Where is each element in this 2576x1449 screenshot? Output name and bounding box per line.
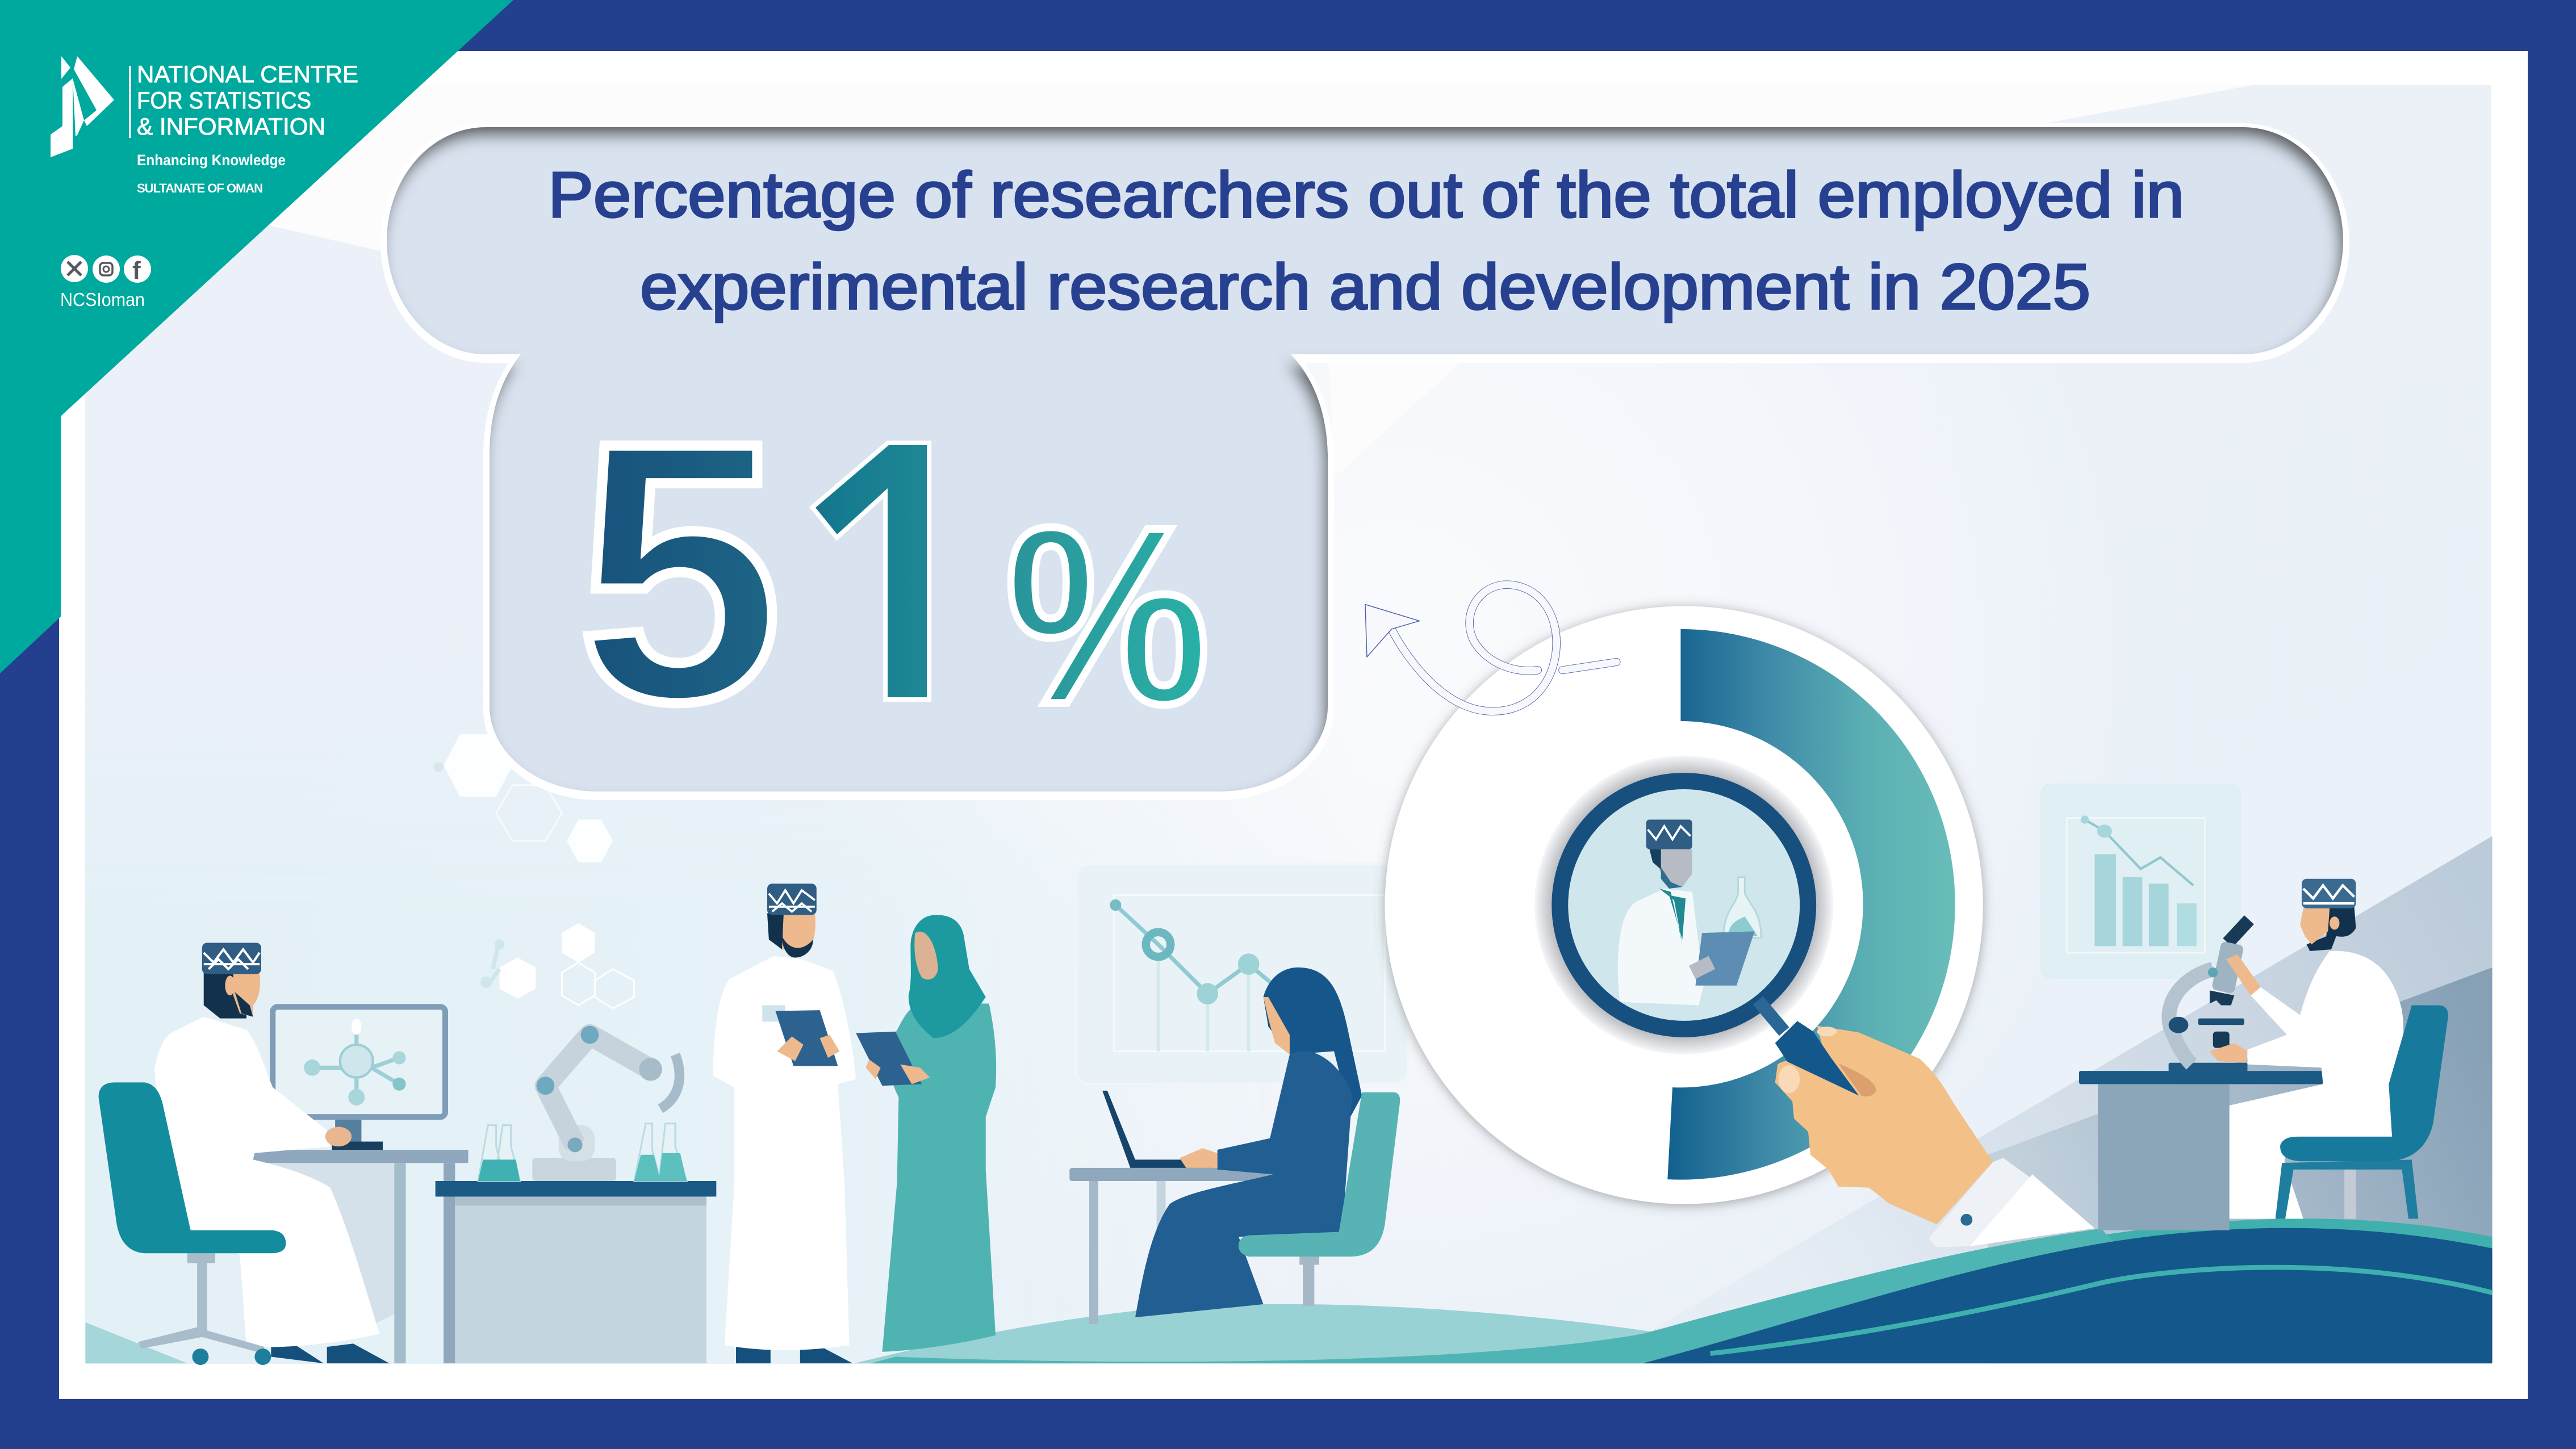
title text: experimental research and development in 2025	[640, 251, 2090, 323]
figure	[1264, 968, 1362, 1117]
title text: Percentage of researchers out of the total employed in	[548, 159, 2184, 231]
big value 51 percent	[583, 441, 1207, 709]
head	[767, 883, 817, 958]
robe	[154, 1017, 379, 1347]
researcher in lens	[1618, 820, 1761, 1005]
desk	[1069, 1168, 1273, 1324]
curly arrow	[1365, 585, 1617, 711]
ground waves	[85, 1304, 1709, 1363]
flasks	[478, 1124, 687, 1181]
organisation name: FOR STATISTICS	[137, 87, 311, 114]
icon: Facebook	[124, 256, 151, 284]
seated man at computer	[99, 943, 468, 1365]
hand holding magnifier	[1775, 1021, 2094, 1247]
monitor	[273, 1007, 445, 1146]
percent sign: %	[1005, 475, 1210, 757]
divider	[129, 66, 131, 138]
chair	[2276, 1005, 2448, 1219]
digit 1	[809, 441, 931, 702]
icon: Instagram	[93, 256, 120, 283]
chair	[1239, 1092, 1400, 1306]
logo icon	[51, 56, 114, 157]
microscope	[2169, 920, 2249, 1072]
hands	[2210, 954, 2261, 1063]
main navy wave	[871, 1218, 2493, 1363]
large white circle	[1385, 606, 1983, 1204]
head	[2300, 879, 2356, 951]
lab bench with robot arm and flasks	[436, 1026, 716, 1363]
icon: Facebook: f	[132, 257, 141, 284]
standing woman in teal hijab with tablet	[856, 915, 996, 1352]
standing man in white with tablet	[713, 883, 856, 1363]
chair	[99, 1082, 286, 1365]
robot arm	[532, 1026, 679, 1181]
donut chart 51 percent	[1667, 629, 1955, 1180]
head	[202, 943, 261, 1019]
grey diagonal background wedges	[1654, 836, 2493, 1363]
hand	[325, 1127, 352, 1146]
seated woman at laptop	[1069, 968, 1400, 1324]
researcher at microscope	[2079, 879, 2448, 1230]
shirt cuff	[1929, 1158, 2094, 1247]
white robe	[2230, 951, 2403, 1219]
handle: NCSIoman	[60, 289, 145, 310]
title and value callout panel	[387, 127, 2343, 794]
organisation name	[137, 61, 358, 140]
chart panel behind microscope researcher	[2040, 784, 2241, 979]
icon: X	[61, 255, 88, 282]
organisation name: & INFORMATION	[137, 113, 325, 140]
desk	[248, 1142, 468, 1363]
desk	[2079, 1071, 2323, 1230]
social media block	[60, 255, 151, 310]
shoes	[271, 1343, 390, 1363]
digit 1: 1	[805, 368, 1011, 781]
tagline: Enhancing Knowledge	[137, 152, 286, 169]
teal corner banner	[0, 0, 513, 673]
title text	[548, 159, 2184, 323]
magnifying glass	[1534, 756, 1833, 1054]
chart panel behind seated woman	[1076, 864, 1408, 1084]
background hexagon molecules	[434, 734, 634, 1008]
digit 5: 5	[577, 366, 783, 778]
hand shape	[1775, 1026, 1993, 1224]
country: SULTANATE OF OMAN	[137, 181, 263, 195]
organisation name: NATIONAL CENTRE	[137, 61, 358, 87]
laptop	[1102, 1091, 1214, 1168]
logo block	[51, 56, 358, 195]
